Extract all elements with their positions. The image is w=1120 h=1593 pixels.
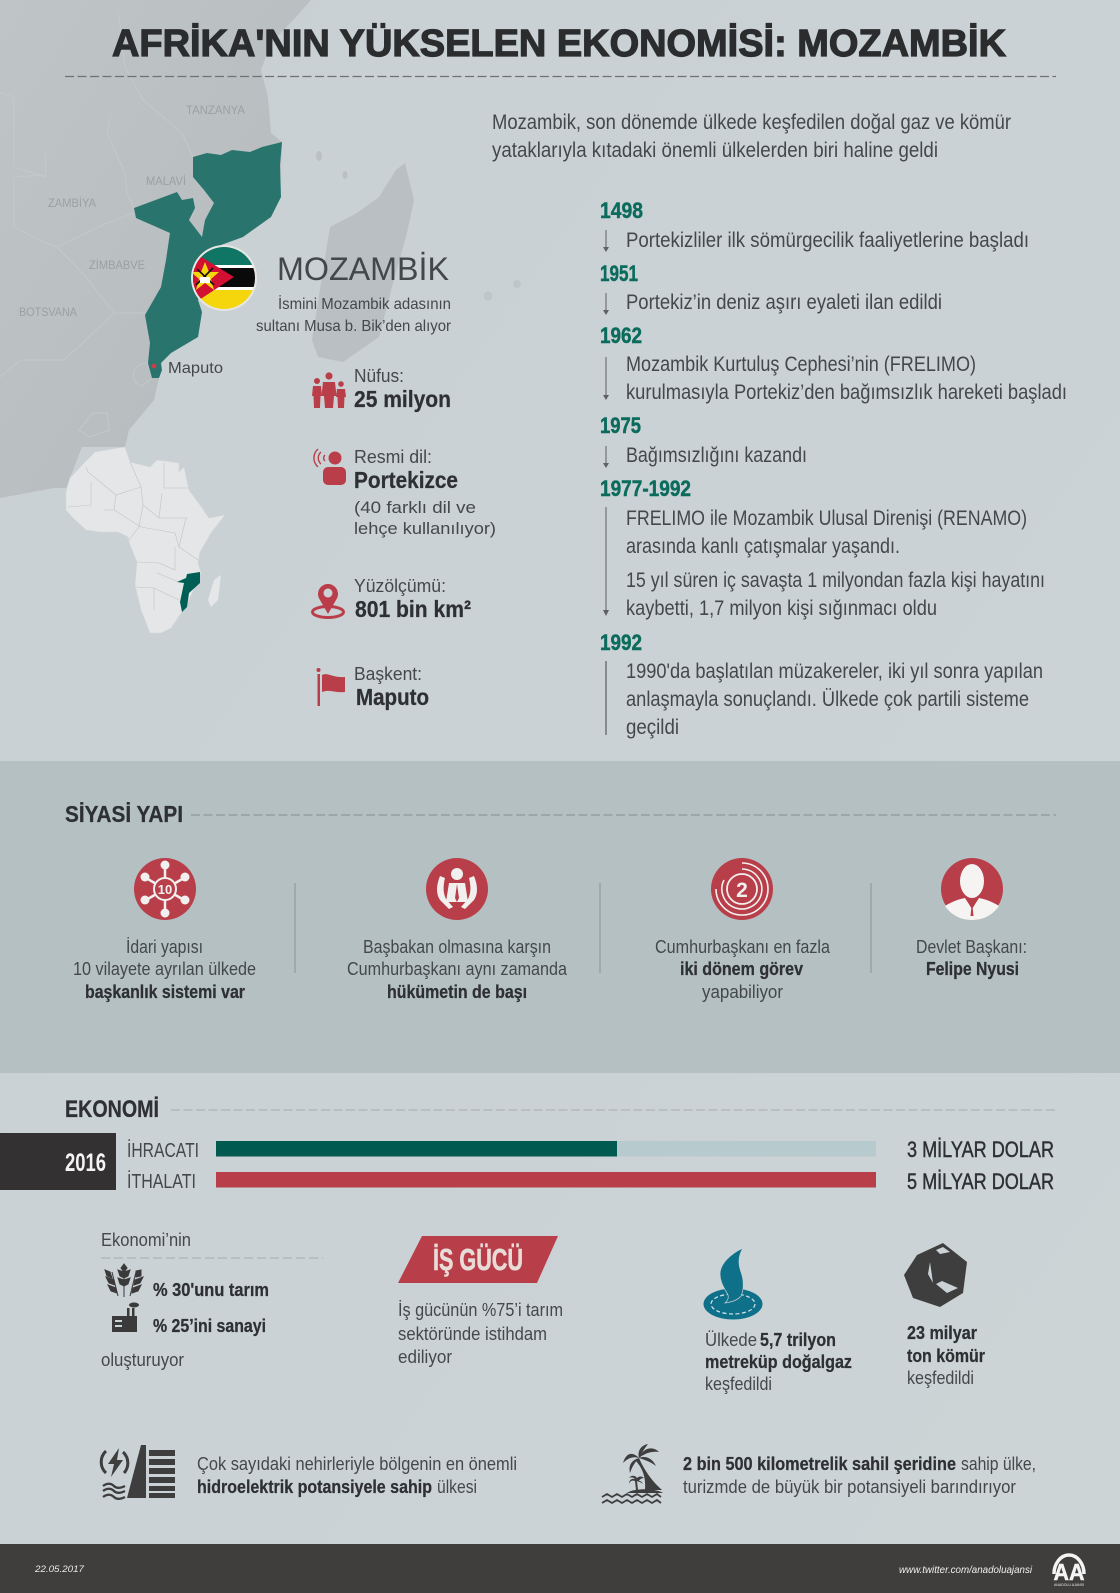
icon: Mozambique flag xyxy=(190,245,260,312)
year 1498: 1498 xyxy=(600,198,643,223)
block: coastline tourism: 2 bin 500 kilometrelik sahil şeridine xyxy=(683,1454,956,1474)
block: economy composition: oluşturuyor xyxy=(101,1350,184,1370)
item: prime minister: Cumhurbaşkanı aynı zamanda xyxy=(347,959,568,979)
block: hydroelectric: Çok sayıdaki nehirleriyle bölgenin en önemli xyxy=(197,1454,517,1474)
bar chart: exports and imports 2016 xyxy=(0,1133,1054,1194)
block: coal xyxy=(904,1243,985,1388)
item: president xyxy=(916,858,1027,979)
twitter address: www.twitter.com/anadoluajansi xyxy=(899,1564,1033,1576)
icon: official in hands xyxy=(426,858,488,920)
block: economy composition xyxy=(101,1230,323,1370)
icon: hydroelectric dam xyxy=(101,1445,175,1499)
icon: president bust xyxy=(941,858,1003,920)
block: natural gas: 5,7 trilyon xyxy=(760,1330,836,1350)
heading: Siyasi Yapı: SİYASİ YAPI xyxy=(65,801,183,827)
year 1977-1992: FRELIMO ile Mozambik Ulusal Direnişi (RENAMO) xyxy=(626,507,1027,530)
icon: people xyxy=(312,372,346,408)
block: hydroelectric: hidroelektrik potansiyele sahip xyxy=(197,1477,432,1497)
fact: area xyxy=(312,576,471,622)
bar chart: exports and imports 2016: 5 MİLYAR DOLAR xyxy=(907,1169,1054,1194)
icon: location pin xyxy=(312,584,344,618)
footer xyxy=(0,1544,1120,1593)
year 1992: 1990'da başlatılan müzakereler, iki yıl sonra yapılan xyxy=(626,660,1043,683)
item: two terms: iki dönem görev xyxy=(680,959,803,979)
icon: two terms target: 2 xyxy=(736,879,748,902)
block: coastline tourism: turizmde de büyük bir potansiyeli barındırıyor xyxy=(683,1477,1016,1497)
block: coal: 23 milyar xyxy=(907,1323,977,1343)
year 1992: anlaşmayla sonuçlandı. Ülkede çok partili sisteme xyxy=(626,688,1029,711)
map label: Maputo: Maputo xyxy=(168,360,223,377)
block: natural gas: metreküp doğalgaz xyxy=(705,1352,852,1372)
year 1977-1992: 15 yıl süren iç savaşta 1 milyondan fazla kişi hayatını xyxy=(626,569,1045,592)
item: prime minister xyxy=(347,858,568,1002)
year 1498 xyxy=(600,198,1029,252)
inset map: Africa xyxy=(66,447,225,633)
map labels: TANZANYA xyxy=(186,103,245,117)
year 1975: 1975 xyxy=(600,413,641,438)
fact: official language xyxy=(314,447,496,538)
heading: Ekonomi: EKONOMİ xyxy=(65,1096,159,1123)
block: labour force: ediliyor xyxy=(398,1347,452,1367)
panel: political structure xyxy=(0,761,1120,1073)
block: economy composition: % 25’ini sanayi xyxy=(153,1316,266,1336)
block: coal: ton kömür xyxy=(907,1346,985,1366)
fact: official language: lehçe kullanılıyor) xyxy=(354,519,496,538)
block: labour force: İş gücünün %75’i tarım xyxy=(398,1300,563,1320)
year 1962: kurulmasıyla Portekiz’den bağımsızlık hareketi başladı xyxy=(626,381,1067,404)
badge: İş Gücü xyxy=(398,1236,558,1283)
fact: official language: Portekizce xyxy=(354,467,458,493)
map labels: ZİMBABVE xyxy=(89,258,145,272)
block: coastline tourism xyxy=(602,1444,1036,1503)
bar chart: exports and imports 2016: 3 MİLYAR DOLAR xyxy=(907,1137,1054,1162)
block: labour force: sektöründe istihdam xyxy=(398,1324,547,1344)
fact: official language: (40 farklı dil ve xyxy=(354,498,476,517)
item: two terms: Cumhurbaşkanı en fazla xyxy=(655,937,831,957)
block: coastline tourism: sahip ülke, xyxy=(961,1454,1036,1474)
icon: two terms target xyxy=(711,858,773,920)
icon: ten provinces hub: 10 xyxy=(158,882,172,897)
year 1951: 1951 xyxy=(600,261,638,286)
year 1951 xyxy=(600,261,942,314)
block: hydroelectric: ülkesi xyxy=(437,1477,477,1497)
icon: factory xyxy=(112,1302,139,1332)
icon: palm island xyxy=(602,1444,663,1503)
icon: flag xyxy=(316,668,345,706)
year 1992: 1992 xyxy=(600,630,642,655)
intro text: yataklarıyla kıtadaki önemli ülkelerden biri haline geldi xyxy=(492,139,938,162)
icon: ten provinces hub xyxy=(134,858,196,920)
fact: area: 801 bin km² xyxy=(355,596,471,622)
year 1992: geçildi xyxy=(626,716,679,739)
fact: area: Yüzölçümü: xyxy=(354,576,446,596)
logo: Anadolu Agency: AA xyxy=(1054,1559,1084,1585)
item: prime minister: hükümetin de başı xyxy=(387,982,527,1002)
block: hydroelectric xyxy=(101,1445,517,1499)
year 1962 xyxy=(600,323,1067,404)
year 1951: Portekiz’in deniz aşırı eyaleti ilan edildi xyxy=(626,291,942,314)
year 1498: Portekizliler ilk sömürgecilik faaliyetlerine başladı xyxy=(626,229,1029,252)
fact: capital xyxy=(316,664,429,710)
block: natural gas xyxy=(704,1248,852,1394)
bar chart: exports and imports 2016: İTHALATI xyxy=(127,1170,196,1193)
fact: capital: Maputo xyxy=(356,684,429,710)
item: administration: 10 vilayete ayrılan ülkede xyxy=(73,959,256,979)
item: two terms xyxy=(655,858,831,1002)
year 1977-1992: arasında kanlı çatışmalar yaşandı. xyxy=(626,535,900,558)
year 1975: Bağımsızlığını kazandı xyxy=(626,444,807,467)
block: natural gas: Ülkede xyxy=(705,1330,757,1350)
bar chart: exports and imports 2016: İHRACATI xyxy=(127,1139,199,1162)
year 1977-1992: kaybetti, 1,7 milyon kişi sığınmacı oldu xyxy=(626,597,937,620)
icon: coal lump xyxy=(904,1243,967,1307)
icon: wheat xyxy=(105,1264,143,1297)
block: natural gas: keşfedildi xyxy=(705,1374,772,1394)
year 1962: Mozambik Kurtuluş Cephesi’nin (FRELIMO) xyxy=(626,353,976,376)
text: name origin: sultanı Musa b. Bik’den alıyor xyxy=(256,318,452,335)
item: prime minister: Başbakan olmasına karşın xyxy=(363,937,551,957)
item: president: Devlet Başkanı: xyxy=(916,937,1027,957)
year 1992 xyxy=(600,630,1043,739)
heading: Mozambik: MOZAMBİK xyxy=(277,251,449,287)
item: president: Felipe Nyusi xyxy=(926,959,1019,979)
item: administration: İdari yapısı xyxy=(126,937,203,957)
intro text: Mozambik, son dönemde ülkede keşfedilen doğal gaz ve kömür xyxy=(492,111,1011,134)
intro text xyxy=(492,111,1011,162)
date: 22.05.2017 xyxy=(34,1564,85,1575)
map labels xyxy=(19,103,245,319)
map labels: BOTSVANA xyxy=(19,305,77,319)
logo: Anadolu Agency: ANADOLU AJANSI xyxy=(1054,1582,1084,1587)
item: administration xyxy=(73,858,256,1002)
fact: population: Nüfus: xyxy=(354,366,404,386)
title: AFRİKA'NIN YÜKSELEN EKONOMİSİ: MOZAMBİK xyxy=(112,22,1007,65)
icon: speaker xyxy=(314,449,346,485)
map labels: MALAVİ xyxy=(146,174,186,188)
badge: İş Gücü: İŞ GÜCÜ xyxy=(433,1242,523,1277)
item: two terms: yapabiliyor xyxy=(702,982,783,1002)
fact: official language: Resmi dil: xyxy=(354,447,432,467)
text: name origin: İsmini Mozambik adasının xyxy=(278,294,451,313)
block: economy composition: Ekonomi’nin xyxy=(101,1230,191,1250)
timeline xyxy=(600,198,1067,739)
map: regional map of south-east Africa xyxy=(0,0,521,498)
year 1975 xyxy=(600,413,807,467)
year 1977-1992: 1977-1992 xyxy=(600,476,691,501)
icon: gas well flame xyxy=(704,1248,762,1320)
country: Mozambique on map xyxy=(134,142,282,378)
country: Mozambique on inset xyxy=(177,572,200,612)
fact: capital: Başkent: xyxy=(354,664,422,684)
text: name origin xyxy=(256,294,452,335)
block: coal: keşfedildi xyxy=(907,1368,974,1388)
map labels: ZAMBİYA xyxy=(48,196,96,210)
bar chart: exports and imports 2016: 2016 xyxy=(65,1149,106,1177)
year 1962: 1962 xyxy=(600,323,642,348)
block: labour force xyxy=(398,1236,563,1367)
fact: population xyxy=(312,366,451,412)
block: economy composition: % 30'unu tarım xyxy=(153,1280,269,1300)
year 1977-1992 xyxy=(600,476,1045,620)
item: administration: başkanlık sistemi var xyxy=(85,982,245,1002)
fact: population: 25 milyon xyxy=(354,386,451,412)
